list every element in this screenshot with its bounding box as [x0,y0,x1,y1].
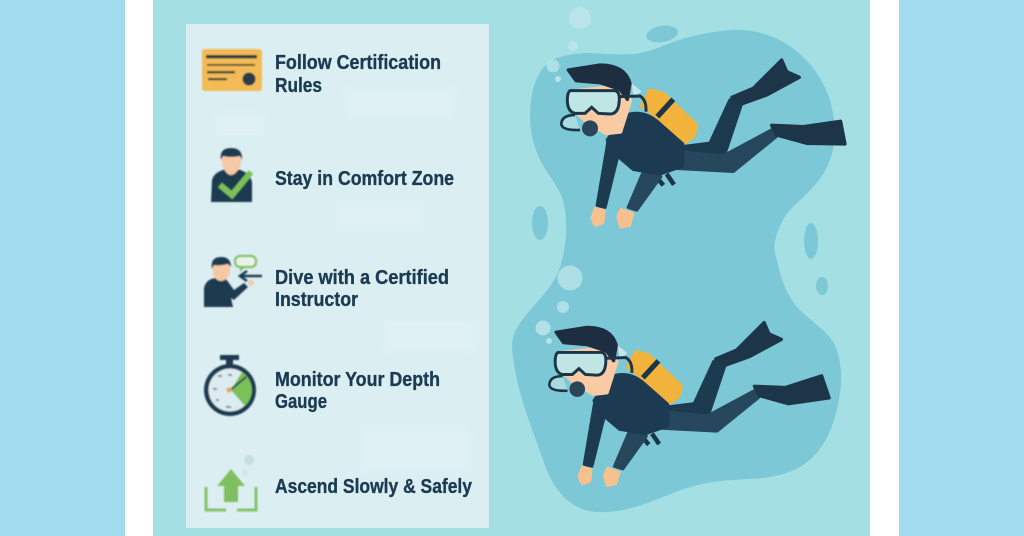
water spots [532,23,828,295]
text: Monitor Your Depth Gauge: Gauge [275,391,327,413]
illustration: lower diver [549,322,829,485]
text: Dive with a Certified Instructor [275,267,449,311]
text: Stay in Comfort Zone: Stay in Comfort Zone [275,168,454,190]
icon: instructor with speech bubble [204,256,262,307]
panel: safety checklist card [186,24,489,528]
text: Monitor Your Depth Gauge: Monitor Your Depth [275,369,440,391]
white frame [125,0,899,536]
text: Dive with a Certified Instructor: Dive with a Certified [275,267,449,289]
text: Monitor Your Depth Gauge [275,369,440,413]
water blob [512,30,841,512]
icon: ascend arrow [206,455,256,510]
text: Ascend Slowly & Safely: Ascend Slowly & Safely [275,476,473,498]
icon: person with check mark [211,148,252,202]
icon: certification card [202,49,262,91]
icon: depth gauge stopwatch [204,355,256,416]
text: Follow Certification Rules [275,52,441,97]
illustration: upper diver [561,60,845,227]
bubbles [536,7,591,344]
text: Follow Certification Rules: Follow Certification [275,52,441,74]
text: Dive with a Certified Instructor: Instructor [275,289,358,311]
text: Follow Certification Rules: Rules [275,75,322,97]
teal panel [153,0,870,536]
